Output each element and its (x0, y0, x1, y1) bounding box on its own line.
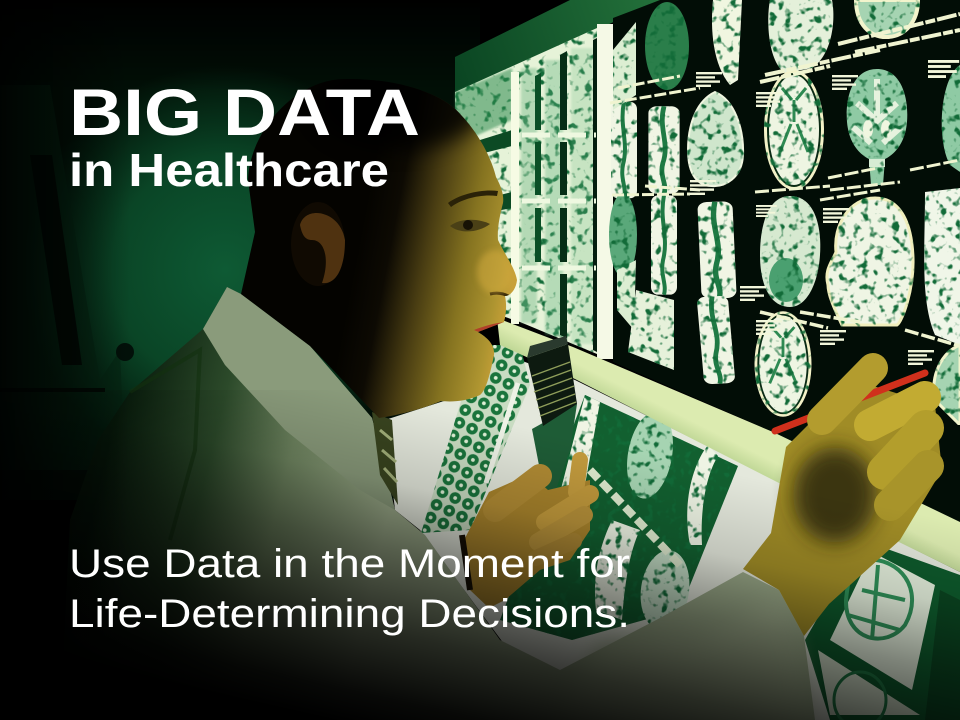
tagline line two: Life-Determining Decisions. (69, 592, 630, 636)
film labels (610, 14, 960, 365)
dark film (500, 395, 738, 640)
panel: green light shelf (497, 318, 960, 572)
light box housing (455, 0, 662, 92)
dictaphone (527, 336, 577, 512)
tagline line one: Use Data in the Moment for (69, 542, 630, 586)
panel: MRI film wall (609, 0, 960, 522)
tie (372, 412, 398, 505)
red pen (775, 373, 925, 431)
ear (291, 202, 345, 286)
panel: lower light box with films (385, 345, 960, 720)
title: BIG DATA: BIG DATA (69, 75, 420, 149)
wristwatch (462, 535, 470, 590)
tie stripes (380, 430, 397, 482)
door at left (0, 85, 134, 470)
lower right film (805, 540, 960, 720)
left hand (464, 460, 590, 608)
lab coat (60, 287, 815, 720)
film columns (521, 38, 597, 352)
panel: washed out films, left light box (455, 24, 613, 359)
facial features (398, 86, 514, 332)
head (241, 79, 517, 418)
right hand (743, 368, 942, 636)
brain scans (609, 0, 960, 425)
subtitle: in Healthcare: in Healthcare (69, 144, 389, 196)
